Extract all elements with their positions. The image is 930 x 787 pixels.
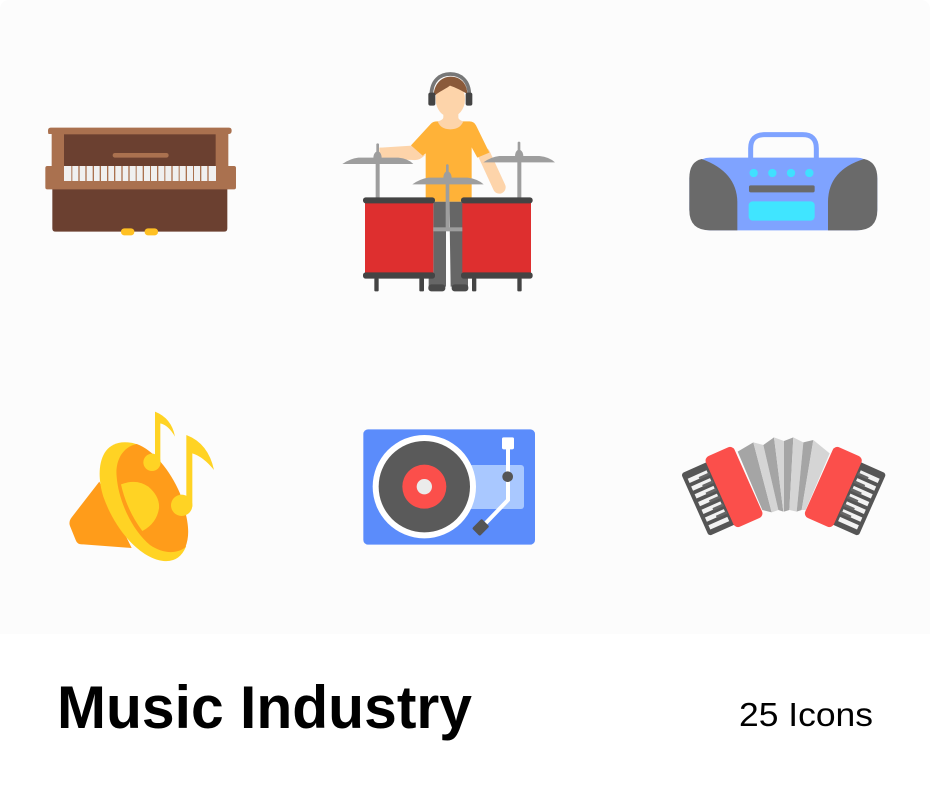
right drum rims bbox=[461, 197, 533, 279]
cymbal stands bbox=[376, 157, 521, 198]
headphone band bbox=[431, 74, 469, 95]
right keyboard bbox=[828, 460, 886, 536]
piano keys bbox=[64, 166, 216, 181]
horn inner bowl bbox=[116, 444, 188, 552]
left drum feet bbox=[374, 278, 424, 291]
left speaker bbox=[689, 159, 737, 230]
icon: boombox bbox=[689, 135, 877, 230]
piano fallboard bbox=[64, 134, 216, 168]
boombox buttons bbox=[749, 169, 813, 177]
turntable light panel bbox=[463, 465, 524, 509]
right cymbal bbox=[483, 142, 555, 162]
record spindle bbox=[417, 479, 432, 494]
horn rim bbox=[100, 442, 186, 561]
right drum shell bbox=[462, 203, 531, 273]
drummer neck bbox=[438, 110, 463, 129]
right red bellows board bbox=[803, 445, 863, 529]
drummer hair bbox=[434, 77, 467, 97]
small music note bbox=[143, 412, 175, 471]
left drum shell bbox=[365, 203, 433, 273]
drummer legs bbox=[429, 202, 468, 287]
tonearm cartridge bbox=[472, 519, 489, 536]
tonearm pivot bbox=[502, 471, 513, 482]
drummer shirt bbox=[411, 121, 489, 202]
title: Music Industry bbox=[57, 674, 473, 741]
piano key ledge bbox=[45, 166, 236, 189]
left cymbal bbox=[342, 143, 413, 164]
turntable base bbox=[363, 429, 535, 545]
icon count label: 25 Icons bbox=[739, 696, 873, 733]
bellows folds bbox=[738, 437, 830, 512]
record label bbox=[402, 465, 446, 509]
piano pedals bbox=[121, 228, 158, 235]
left red bellows board bbox=[704, 445, 764, 529]
tonearm bbox=[482, 443, 508, 527]
boombox display bbox=[749, 201, 815, 221]
boombox body bbox=[689, 158, 877, 230]
drummer left arm bbox=[379, 146, 425, 160]
platter ring bbox=[373, 435, 476, 538]
right drum bbox=[461, 197, 533, 291]
right speaker bbox=[828, 159, 877, 230]
centre cymbal and stand bbox=[412, 164, 484, 231]
piano body bbox=[52, 187, 227, 232]
horn cone bbox=[69, 482, 132, 548]
tonearm counterweight bbox=[502, 437, 514, 449]
drummer shoes bbox=[428, 284, 468, 291]
drummer head bbox=[436, 82, 465, 117]
headphone ear cups bbox=[428, 93, 472, 106]
piano music rest bbox=[113, 153, 169, 158]
left keyboard bbox=[681, 460, 739, 536]
piano uprights and lid bbox=[48, 128, 232, 168]
icon: upright piano bbox=[45, 128, 236, 235]
cassette slot bbox=[749, 185, 815, 192]
left drum bbox=[363, 197, 435, 291]
left drum rims bbox=[363, 197, 435, 279]
large music note bbox=[171, 435, 214, 516]
right drum feet bbox=[472, 278, 522, 291]
icon: accordion bbox=[681, 437, 886, 536]
drummer right arm bbox=[484, 154, 499, 187]
icon: horn with music notes bbox=[69, 412, 214, 561]
horn speaker cap bbox=[121, 482, 159, 531]
icon: record turntable bbox=[363, 429, 535, 545]
vinyl record bbox=[379, 441, 470, 532]
boombox handle bbox=[751, 135, 816, 159]
icon: drummer with drum kit bbox=[342, 74, 555, 291]
